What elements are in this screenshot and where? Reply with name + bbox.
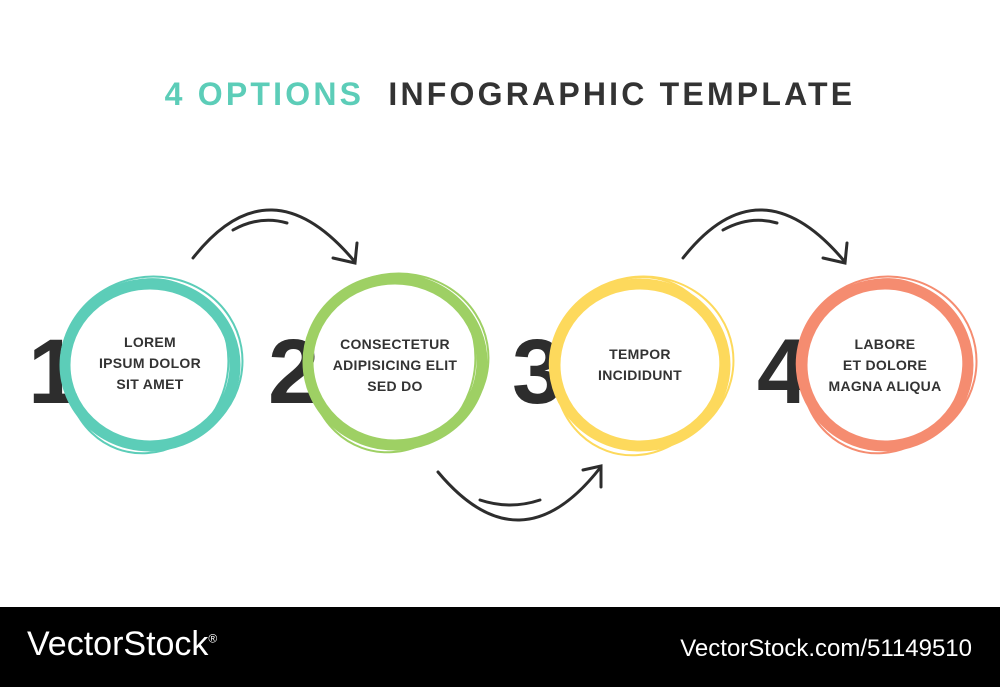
footer bar <box>0 607 1000 687</box>
step 2 <box>268 251 502 476</box>
step 4 <box>757 256 990 476</box>
text 2: CONSECTETUR <box>340 336 450 352</box>
text 4: ET DOLORE <box>843 357 927 373</box>
step 4: 4 <box>757 321 808 423</box>
step 3 <box>512 254 747 479</box>
text 4: LABORE <box>855 336 915 352</box>
text 2: ADIPISICING ELIT <box>333 357 457 373</box>
text 2: SED DO <box>367 378 423 394</box>
step 3: 3 <box>512 321 563 423</box>
step 1 <box>28 256 256 476</box>
arrow 2 to 3 <box>438 466 601 520</box>
text 1: LOREM <box>124 334 176 350</box>
text 4 <box>828 336 942 394</box>
title: 4 OPTIONS INFOGRAPHIC TEMPLATE <box>165 76 855 112</box>
arrow 1 to 2 <box>193 210 357 263</box>
text 3 <box>598 346 682 383</box>
text 4: MAGNA ALIQUA <box>828 378 942 394</box>
text 1: IPSUM DOLOR <box>99 355 201 371</box>
arrow 3 to 4 <box>683 210 847 263</box>
footer url: VectorStock.com/51149510 <box>680 635 972 662</box>
footer brand: VectorStock® <box>27 625 217 663</box>
step 1: 1 <box>28 321 79 423</box>
text 1: SIT AMET <box>116 376 184 392</box>
text 2 <box>333 336 457 394</box>
text 3: TEMPOR <box>609 346 671 362</box>
text 3: INCIDIDUNT <box>598 367 682 383</box>
step 2: 2 <box>268 321 319 423</box>
text 1 <box>99 334 201 392</box>
